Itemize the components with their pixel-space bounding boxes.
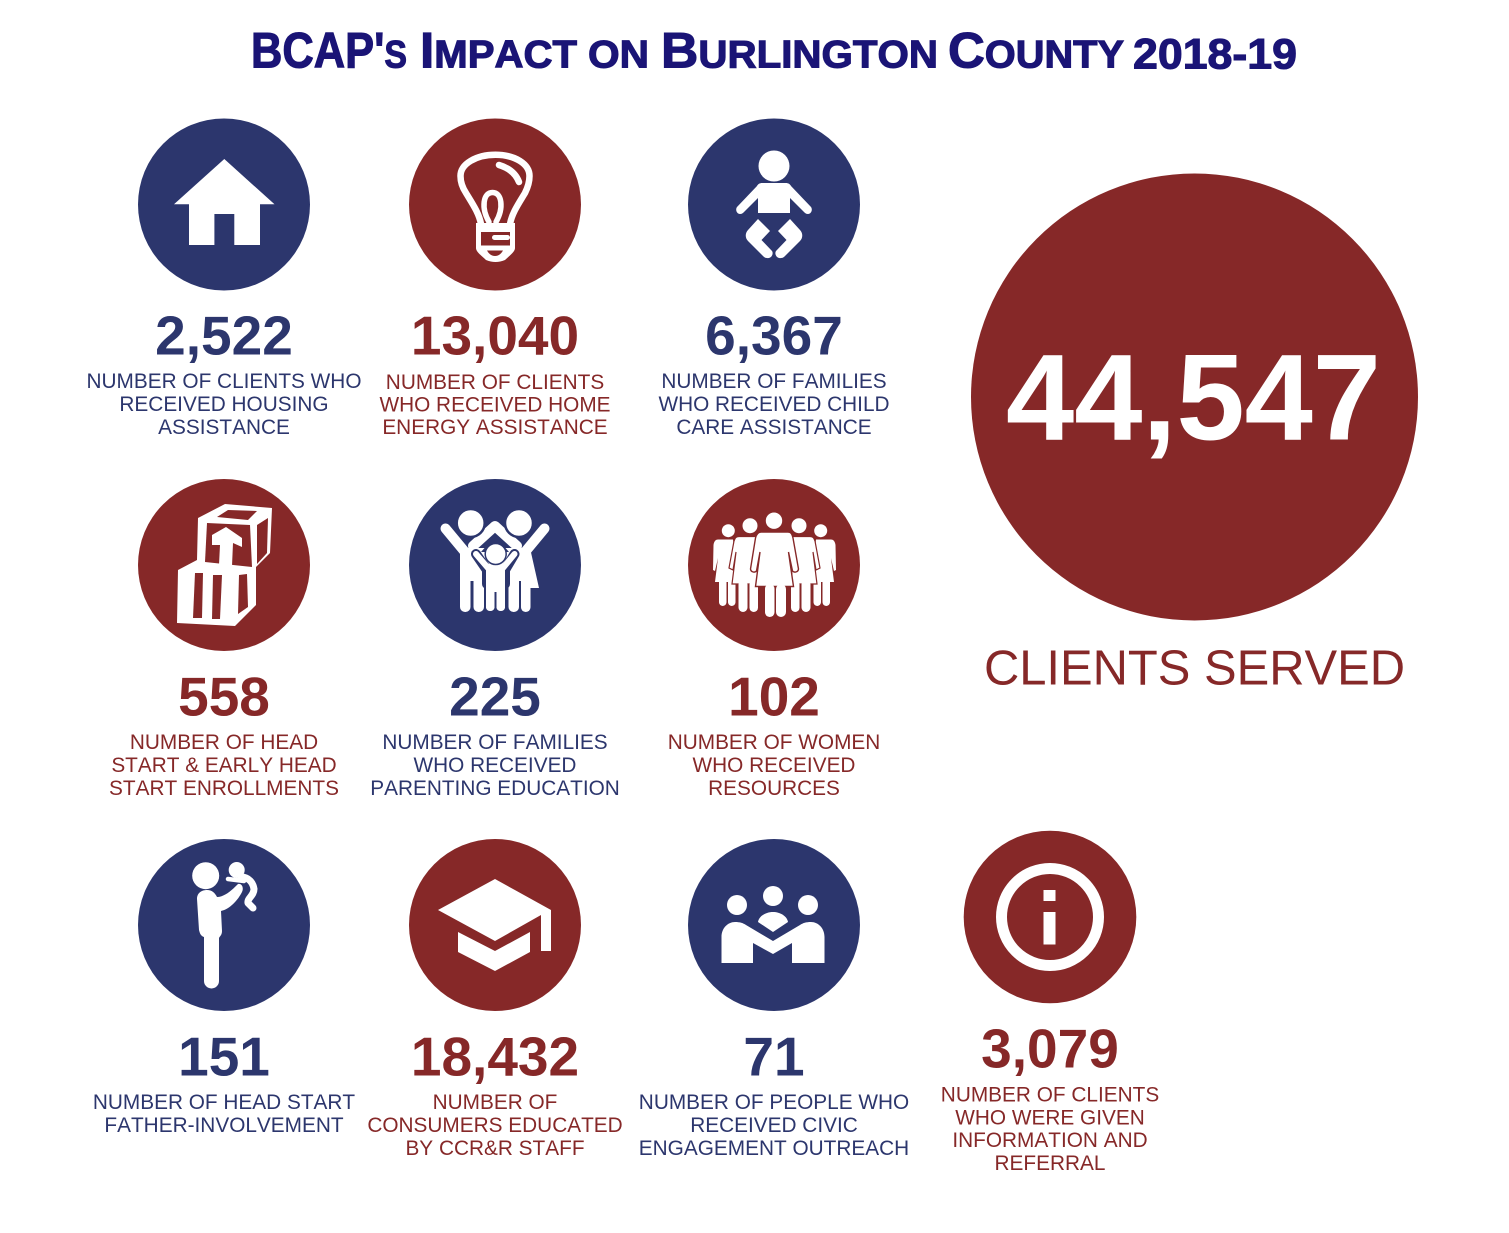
- number: parenting: 225: [449, 666, 541, 728]
- label: home energy: WHO RECEIVED HOME: [379, 394, 611, 416]
- label: head start: NUMBER OF HEAD: [130, 731, 318, 754]
- label: civic engagement: ENGAGEMENT OUTREACH: [639, 1137, 909, 1160]
- panel: parenting education: [370, 479, 620, 800]
- panel: total clients served: [971, 174, 1418, 696]
- number: information: 3,079: [981, 1018, 1119, 1080]
- label: women: RESOURCES: [708, 777, 840, 800]
- label: consumers educated: NUMBER OF: [433, 1091, 557, 1114]
- number: home energy: 13,040: [411, 305, 579, 367]
- label: father involvement: NUMBER OF HEAD START: [93, 1091, 355, 1114]
- label: information: REFERRAL: [995, 1152, 1105, 1175]
- label: housing: NUMBER OF CLIENTS WHO: [86, 370, 362, 393]
- big circle: [971, 174, 1418, 620]
- label: child care: NUMBER OF FAMILIES: [661, 370, 887, 393]
- label: parenting: NUMBER OF FAMILIES: [382, 731, 608, 754]
- panel: head start enrollments: [109, 479, 339, 800]
- label: information: WHO WERE GIVEN: [955, 1106, 1145, 1130]
- number: father involvement: 151: [178, 1026, 270, 1088]
- label: father involvement: FATHER-INVOLVEMENT: [104, 1114, 344, 1137]
- number: consumers educated: 18,432: [411, 1026, 579, 1088]
- panel: women resources: [668, 479, 880, 800]
- panel: housing assistance: [86, 118, 362, 439]
- label: civic engagement: NUMBER OF PEOPLE WHO: [639, 1091, 909, 1114]
- label: consumers educated: CONSUMERS EDUCATED: [367, 1114, 623, 1137]
- title: Impact: [420, 16, 577, 80]
- icon: light bulb: [409, 118, 581, 290]
- icon: father lifting child: [138, 839, 310, 1011]
- panel: home energy assistance: [379, 118, 611, 439]
- label: women: NUMBER OF WOMEN: [668, 731, 880, 754]
- number: civic engagement: 71: [743, 1026, 805, 1088]
- label: home energy: ENERGY ASSISTANCE: [382, 416, 608, 439]
- label: head start: START & EARLY HEAD: [111, 754, 337, 777]
- number: women: 102: [728, 666, 820, 728]
- icon: info: [964, 831, 1136, 1003]
- label: parenting: WHO RECEIVED: [414, 754, 576, 777]
- panel: father involvement: [93, 839, 355, 1137]
- label: civic engagement: RECEIVED CIVIC: [690, 1114, 858, 1137]
- number: child care: 6,367: [705, 305, 843, 367]
- icon: graduation cap: [409, 839, 581, 1011]
- label: home energy: NUMBER OF CLIENTS: [386, 371, 604, 394]
- title: on: [588, 16, 649, 80]
- icon: baby: [688, 118, 860, 290]
- label: information: NUMBER OF CLIENTS: [941, 1084, 1159, 1106]
- icon: community group: [688, 839, 860, 1011]
- label: housing: RECEIVED HOUSING: [119, 393, 329, 416]
- panel: consumers educated: [367, 839, 623, 1160]
- title: 2018-19: [1133, 30, 1297, 78]
- icon: house: [138, 118, 310, 290]
- panel: child care assistance: [658, 118, 890, 439]
- label: child care: WHO RECEIVED CHILD: [658, 393, 890, 416]
- panel: information and referral: [941, 831, 1159, 1175]
- number: head start: 558: [178, 666, 270, 728]
- icon: group of women: [688, 479, 860, 651]
- panel: civic engagement: [639, 839, 909, 1160]
- label: housing: ASSISTANCE: [158, 416, 290, 439]
- title: BCAP's: [251, 16, 407, 80]
- label: consumers educated: BY CCR&R STAFF: [405, 1137, 585, 1160]
- label: parenting: PARENTING EDUCATION: [370, 777, 620, 800]
- label: women: WHO RECEIVED: [693, 754, 855, 777]
- title: Burlington: [661, 16, 938, 80]
- big number: 44,547: [1006, 328, 1381, 466]
- title: County: [948, 16, 1124, 80]
- label: clients served: CLIENTS SERVED: [984, 642, 1405, 696]
- label: head start: START ENROLLMENTS: [109, 777, 339, 800]
- icon: toy blocks: [138, 479, 310, 651]
- icon: family: [409, 479, 581, 651]
- label: information: INFORMATION AND: [952, 1129, 1148, 1152]
- title: [251, 16, 1297, 80]
- number: housing: 2,522: [155, 305, 293, 367]
- label: child care: CARE ASSISTANCE: [676, 416, 872, 439]
